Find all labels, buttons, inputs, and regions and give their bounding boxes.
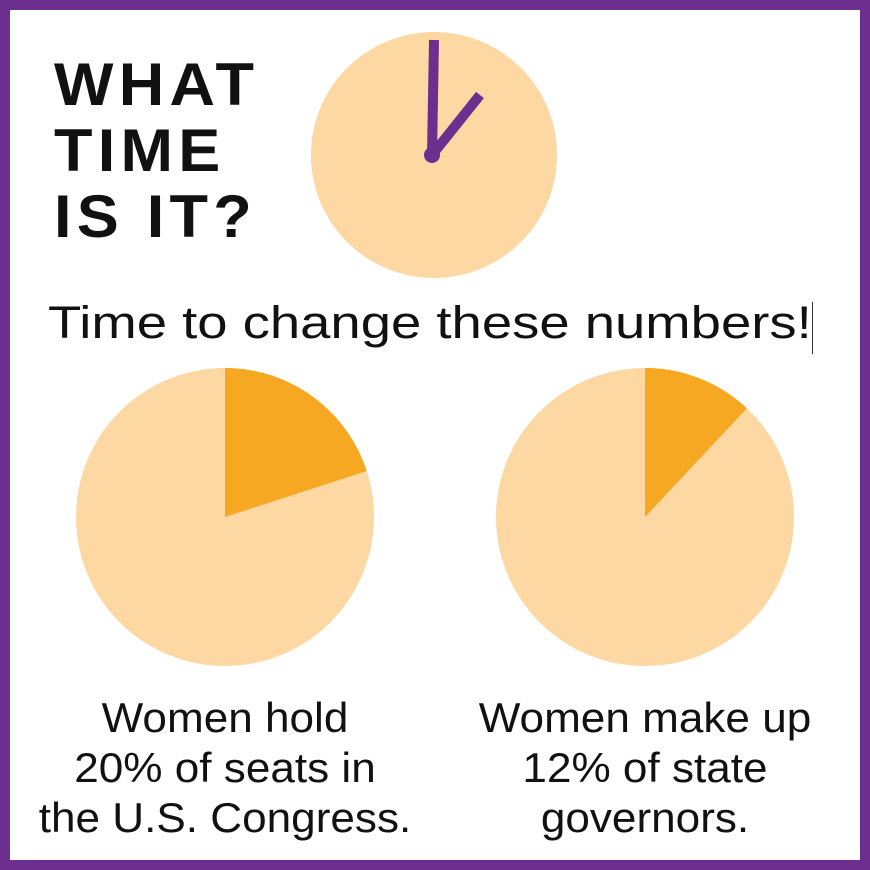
pie chart: congress 20% — [76, 368, 374, 666]
caption: governors: 12% of state — [522, 744, 768, 791]
caption: congress: the U.S. Congress. — [39, 794, 411, 841]
caption: congress: Women hold — [102, 694, 348, 741]
title: IS IT? — [54, 183, 257, 250]
caption: congress: 20% of seats in — [74, 744, 376, 791]
caption: governors: Women make up — [479, 694, 811, 741]
caption: governors: governors. — [541, 794, 749, 841]
subtitle: Time to change these numbers! — [48, 297, 812, 348]
title: WHAT — [54, 51, 259, 118]
title — [54, 51, 259, 250]
caption: congress — [39, 694, 411, 841]
caption: governors — [479, 694, 811, 841]
text cursor — [812, 302, 813, 354]
title: TIME — [54, 117, 225, 184]
pie chart: governors 12% — [496, 368, 794, 666]
